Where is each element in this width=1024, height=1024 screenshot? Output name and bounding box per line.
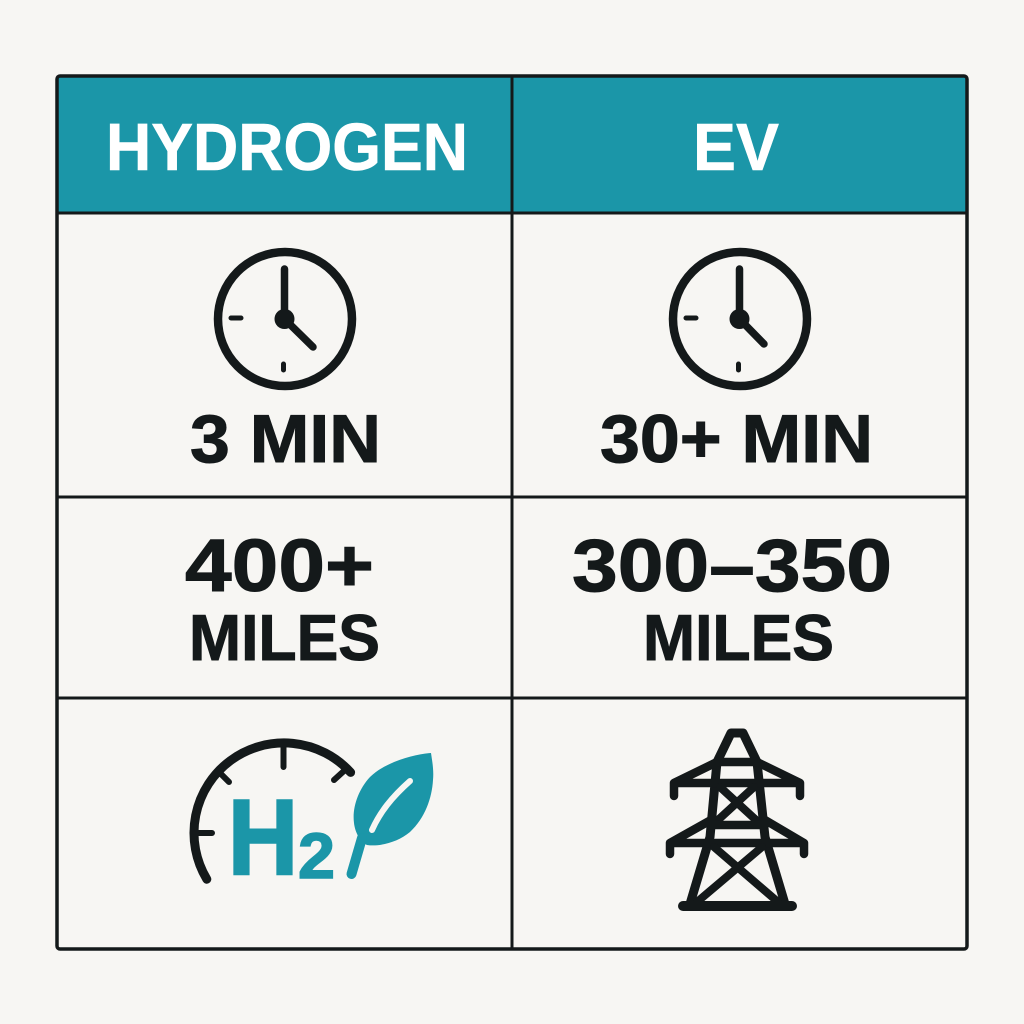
heading: hydrogen: HYDROGEN bbox=[106, 110, 468, 185]
hydrogen range cell bbox=[185, 524, 380, 674]
icon: clock EV bbox=[673, 252, 807, 386]
unit: miles hydrogen: MILES bbox=[189, 601, 380, 674]
H2 label: H bbox=[228, 777, 298, 897]
icon: transmission tower bbox=[670, 733, 804, 906]
heading: EV: EV bbox=[693, 110, 779, 185]
value: 300-350: 300–350 bbox=[572, 524, 892, 607]
comparison table bbox=[57, 76, 967, 949]
hydrogen refuel time cell bbox=[190, 252, 381, 477]
value: 3 min: 3 MIN bbox=[190, 401, 381, 477]
H2 label: 2 bbox=[298, 820, 335, 892]
header band bbox=[57, 76, 967, 213]
gauge arc and ticks bbox=[194, 743, 351, 879]
EV charge time cell bbox=[600, 252, 873, 477]
icon: hydrogen gauge and leaf bbox=[194, 743, 433, 897]
EV range cell bbox=[572, 524, 892, 674]
leaf bbox=[352, 753, 433, 874]
value: 400+: 400+ bbox=[185, 524, 374, 607]
unit: miles EV: MILES bbox=[643, 601, 834, 674]
icon: clock hydrogen bbox=[218, 252, 352, 386]
value: 30+ min: 30+ MIN bbox=[600, 401, 873, 477]
